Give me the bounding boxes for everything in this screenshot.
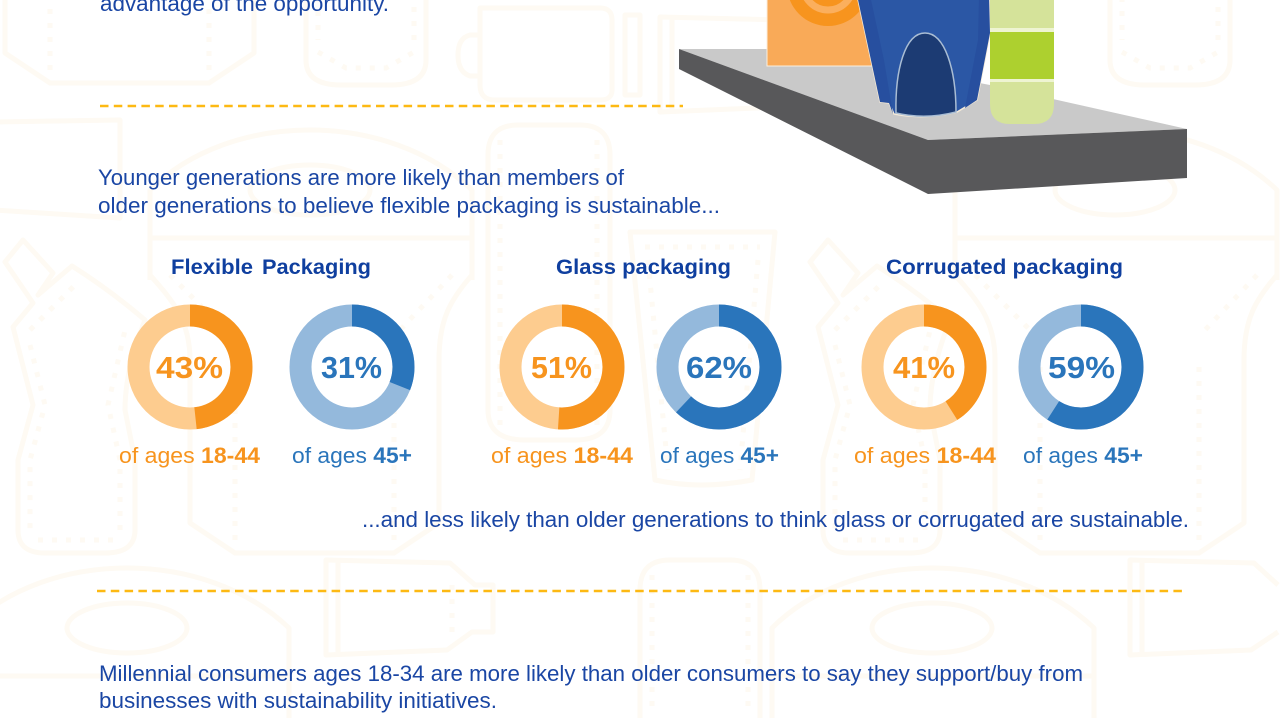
label 45+: of ages 45+: [1023, 443, 1143, 468]
donut 43%: 43%: [156, 350, 223, 385]
label 45+: of ages 45+: [660, 443, 779, 468]
donut 43%: [138, 316, 242, 418]
heading: Glass packaging: [556, 256, 731, 279]
intro sentence: [98, 165, 720, 218]
divider top: [100, 105, 683, 107]
donut 31%: [300, 316, 404, 418]
donut 62%: [668, 316, 770, 418]
heading: Corrugated packaging: [886, 256, 1123, 279]
label 45+: of ages 45+: [292, 443, 412, 468]
intro sentence: Younger generations are more likely than members of: [98, 165, 625, 190]
donut 31%: 31%: [321, 350, 382, 385]
heading: Flexible: [171, 256, 253, 279]
label 18-44: of ages 18-44: [491, 443, 634, 468]
shelf: [679, 49, 1187, 194]
panel: flexible packaging: [119, 256, 412, 468]
donut 41%: 41%: [893, 350, 955, 385]
divider bottom: [97, 590, 1186, 592]
millennial text: businesses with sustainability initiatives.: [99, 688, 497, 713]
millennial text: [99, 661, 1083, 713]
donut 59%: [1030, 316, 1132, 418]
donut 51%: 51%: [531, 350, 592, 385]
label 18-44: of ages 18-44: [119, 443, 261, 468]
donut 51%: [510, 316, 614, 418]
orange box package: [767, 0, 892, 66]
millennial text: Millennial consumers ages 18-34 are more likely than older consumers to say they support/buy from: [99, 661, 1083, 686]
conclusion sentence: ...and less likely than older generations to think glass or corrugated are sustainable.: [362, 507, 1189, 532]
green bottle: [990, 0, 1054, 124]
illustration: packages on shelf: [679, 0, 1187, 194]
blue bottle: [857, 0, 990, 117]
donut 41%: [872, 316, 976, 418]
panel: glass packaging: [491, 256, 779, 468]
heading: Packaging: [262, 256, 371, 279]
panel: corrugated packaging: [854, 256, 1143, 468]
heading: [171, 256, 371, 279]
intro sentence: older generations to believe flexible packaging is sustainable...: [98, 193, 720, 218]
donut 59%: 59%: [1048, 350, 1115, 385]
donut 62%: 62%: [686, 350, 752, 385]
label 18-44: of ages 18-44: [854, 443, 997, 468]
